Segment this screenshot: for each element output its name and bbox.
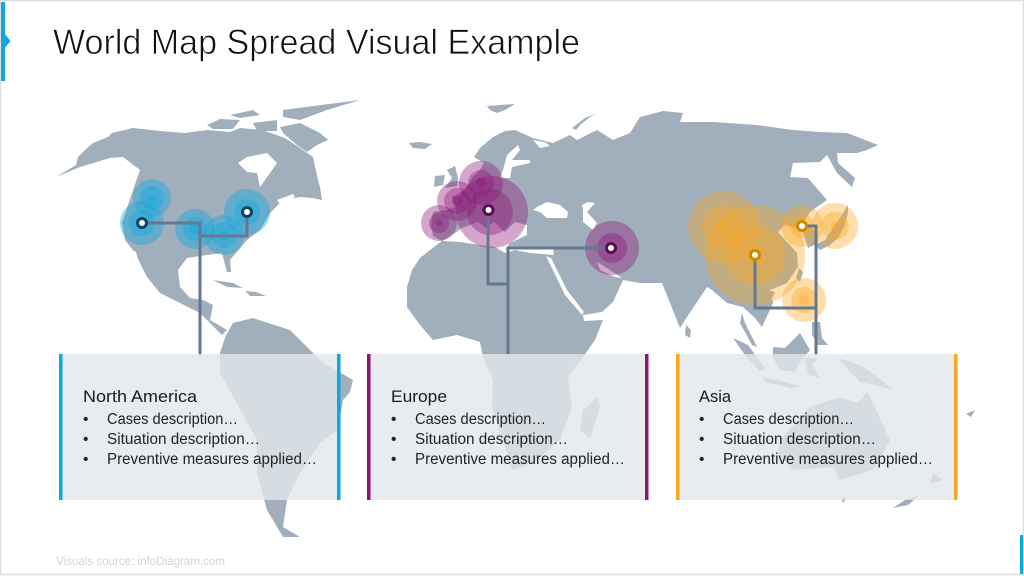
map: Eurasia and Africa	[407, 111, 878, 470]
world map	[56, 100, 975, 537]
list: Asia: •	[699, 451, 704, 468]
accent: bottom right bar	[1020, 535, 1023, 574]
list: Asia: •	[699, 411, 704, 428]
orange outbreak circles: Asia	[688, 191, 858, 322]
list: Europe: •	[391, 451, 396, 468]
pins: North America	[138, 208, 252, 228]
heading: North America: North America	[83, 387, 198, 406]
panel: Europe	[367, 354, 648, 500]
map: Caribbean islands	[213, 280, 266, 296]
map: islands of Europe	[409, 104, 597, 188]
map: Madagascar	[580, 397, 600, 438]
map: Arctic islands	[207, 100, 360, 152]
list: North America: Preventive measures applied…	[107, 451, 317, 468]
list: North America: Cases description…	[107, 411, 238, 428]
accent: left title marker	[1, 2, 10, 81]
pins: Asia	[750, 222, 806, 260]
list: Asia: Situation description…	[723, 431, 876, 448]
map: New Zealand and Pacific islands	[841, 410, 975, 508]
list: Europe	[391, 411, 625, 468]
location pins	[138, 206, 806, 260]
map: Southeast Asia islands	[685, 268, 893, 390]
map: Japan	[815, 205, 848, 250]
connector: Asia	[755, 226, 816, 355]
map: South America	[220, 318, 353, 537]
panel: Asia	[676, 354, 958, 500]
list: Europe: Cases description…	[415, 411, 546, 428]
map: seas and lakes	[132, 140, 622, 315]
list: Asia: •	[699, 431, 704, 448]
connectors	[142, 210, 816, 355]
panel: North America	[59, 354, 340, 500]
list: North America: Situation description…	[107, 431, 260, 448]
list: North America	[83, 411, 317, 468]
list: Europe: Situation description…	[415, 431, 568, 448]
source note: Visuals source: infoDiagram.com	[56, 556, 225, 568]
list: North America: •	[83, 431, 88, 448]
list: Asia: Preventive measures applied…	[723, 451, 933, 468]
list: North America: •	[83, 451, 88, 468]
list: Europe: Preventive measures applied…	[415, 451, 625, 468]
list: Asia: Cases description…	[723, 411, 854, 428]
heading: Europe: Europe	[391, 387, 447, 406]
heading: Asia: Asia	[699, 387, 732, 406]
map: Australia	[778, 392, 890, 480]
blue outbreak circles: North America	[120, 179, 270, 255]
list: Europe: •	[391, 431, 396, 448]
connector: Europe	[488, 210, 612, 355]
list: North America: •	[83, 411, 88, 428]
title: World Map Spread Visual Example	[53, 23, 580, 62]
purple outbreak circles: Europe	[421, 161, 639, 275]
pins: Europe	[484, 206, 616, 252]
list: Asia	[699, 411, 933, 468]
list: Europe: •	[391, 411, 396, 428]
map: North America	[56, 128, 322, 335]
connector: North America	[142, 212, 247, 355]
